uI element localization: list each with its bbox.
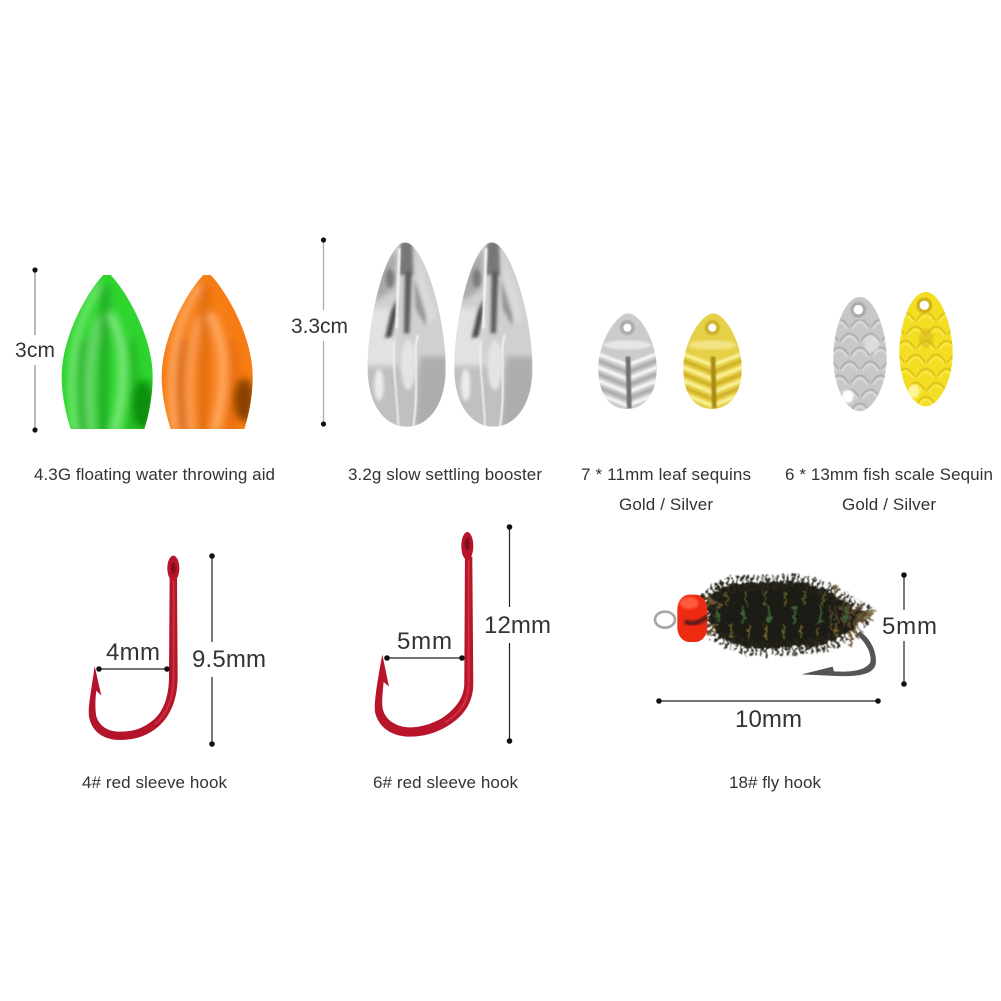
caption: leaf sequins: 7 * 11mm leaf sequins	[581, 465, 751, 484]
caption: leaf sequin colours: Gold / Silver	[619, 495, 713, 514]
dimension: 12mm height: 12mm	[484, 612, 551, 639]
icon: silver teardrop right	[452, 242, 535, 430]
item: leaf sequins	[581, 313, 751, 514]
item: 4# red sleeve hook	[82, 553, 266, 792]
caption: 4# hook: 4# red sleeve hook	[82, 773, 228, 792]
item: floating water throwing aid	[15, 267, 275, 484]
caption: floating water throwing aid: 4.3G floating water throwing aid	[34, 465, 275, 484]
icon: silver leaf sequin	[597, 313, 658, 409]
dimension: 12mm height	[484, 524, 551, 744]
dimension: 4mm gap: 4mm	[106, 639, 160, 666]
icon: 4# red hook	[89, 556, 179, 740]
dimension: 10mm length	[656, 698, 881, 733]
dimension: 4mm gap	[96, 639, 170, 672]
dimension: 3cm	[15, 267, 55, 433]
item: slow settling booster	[291, 237, 542, 484]
item: fish scale sequin	[785, 292, 993, 514]
caption: slow settling booster: 3.2g slow settling booster	[348, 465, 542, 484]
icon: fly hook	[655, 581, 876, 676]
icon: 6# red hook	[375, 532, 473, 737]
icon: gold fish scale sequin	[898, 292, 954, 408]
caption: fish scale colours: Gold / Silver	[842, 495, 936, 514]
icon: orange float	[162, 275, 255, 430]
dimension: 9.5mm height	[192, 553, 266, 747]
dimension: 5mm gap: 5mm	[397, 628, 452, 655]
caption: fish scale sequin: 6 * 13mm fish scale Sequin	[785, 465, 993, 484]
icon: gold leaf sequin	[682, 313, 743, 409]
dimension: 9.5mm height: 9.5mm	[192, 646, 266, 673]
caption: fly hook: 18# fly hook	[729, 773, 822, 792]
dimension: 5mm gap	[384, 628, 465, 661]
dimension: 5mm height: 5mm	[882, 613, 937, 640]
caption: 6# hook: 6# red sleeve hook	[373, 773, 518, 792]
dimension: 3cm: 3cm	[15, 339, 55, 362]
icon: green float	[62, 275, 155, 430]
dimension: 3.3cm: 3.3cm	[291, 315, 348, 338]
item: 18# fly hook	[655, 572, 937, 792]
icon: silver teardrop left	[365, 242, 448, 430]
dimension: 5mm height	[882, 572, 937, 687]
icon: silver fish scale sequin	[832, 297, 888, 413]
dimension: 10mm length: 10mm	[735, 706, 802, 733]
dimension: 3.3cm	[291, 237, 348, 427]
item: 6# red sleeve hook	[373, 524, 551, 792]
